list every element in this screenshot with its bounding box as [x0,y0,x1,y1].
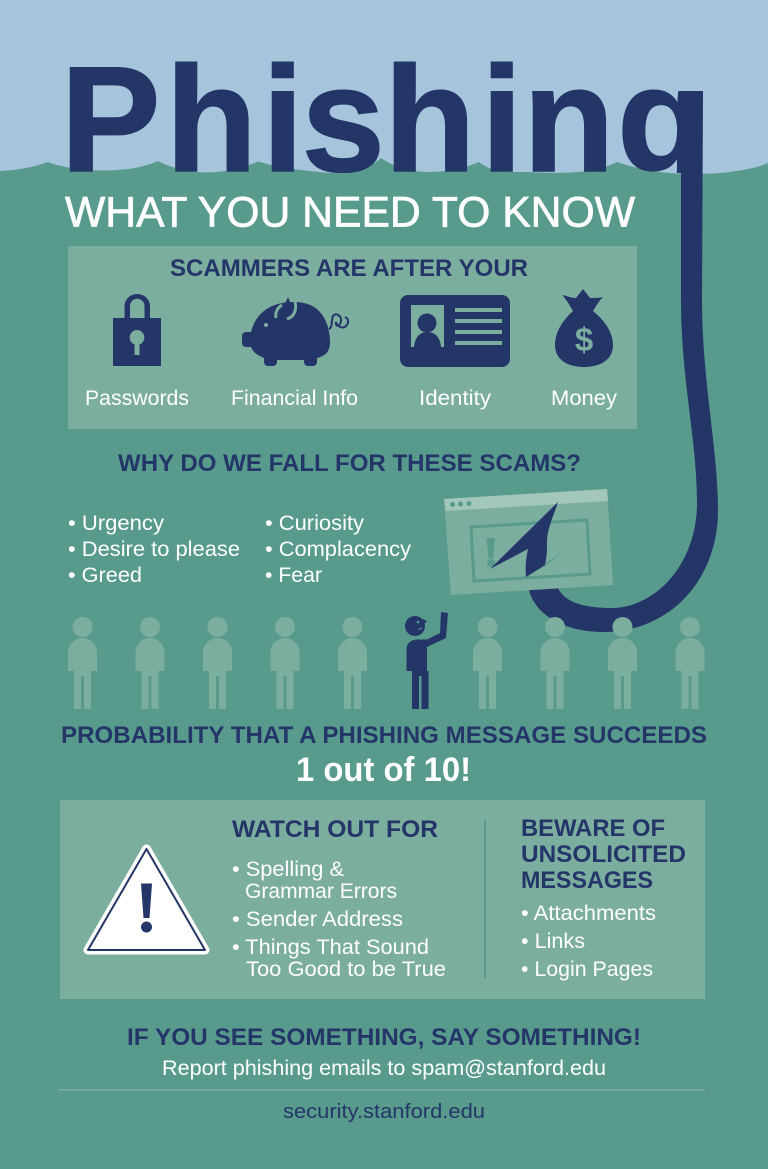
heading: beware of unsolicited messages [521,815,686,894]
person 10 [676,617,704,709]
label: money: Money [551,387,618,410]
heading: beware of unsolicited messages: UNSOLICITED [521,841,686,868]
report instruction: Report phishing emails to spam@stanford.edu [162,1057,606,1080]
list: reasons column two: • Curiosity [265,512,365,535]
heading: why do we fall: WHY DO WE FALL FOR THESE SCAMS? [118,450,581,477]
person 6: navy phished person [405,612,448,709]
person 1 [68,617,97,709]
list: beware items: • Links [521,930,585,953]
list: watch out items: Too Good to be True [246,958,446,981]
list: reasons column one [68,512,240,587]
person 8 [540,617,570,709]
list: beware items: • Attachments [521,902,656,925]
list: beware items: • Login Pages [521,958,653,981]
sky background [0,0,768,180]
heading: beware of unsolicited messages: BEWARE OF [521,815,665,842]
list: watch out items: Grammar Errors [245,880,397,903]
list: watch out items: • Spelling & [232,858,344,881]
person 7 [473,617,502,709]
person 2 [136,617,164,709]
list: watch out items: • Things That Sound [232,936,429,959]
icon: money bag [555,289,613,367]
label: identity: Identity [419,387,492,410]
panel: watch out and beware [60,800,705,999]
heading: beware of unsolicited messages: MESSAGES [521,867,653,894]
list: watch out items [232,858,446,981]
person 5 [338,617,367,709]
list: watch out items: • Sender Address [232,908,403,931]
label: passwords: Passwords [85,387,189,410]
heading: probability: PROBABILITY THAT A PHISHING MESSAGE SUCCEEDS [61,722,707,749]
icon: warning triangle [88,849,205,950]
fish hook line [529,91,718,632]
panel heading: SCAMMERS ARE AFTER YOUR [170,255,528,282]
icon: padlock [113,294,161,366]
icon: hook barb [490,502,558,577]
call to action heading: IF YOU SEE SOMETHING, SAY SOMETHING! [127,1024,641,1051]
panel: scammers are after your [68,246,637,429]
person 9 [608,617,637,709]
statistic: 1 out of 10: 1 out of 10! [296,751,471,789]
person 3 [203,617,232,709]
icon: money bag: $ [575,321,593,358]
people row [68,612,704,709]
icon: piggy bank [242,297,348,366]
list: reasons column one: • Desire to please [68,538,240,561]
icon: id card [400,295,510,367]
list: beware items [521,902,656,981]
list: reasons column two: • Complacency [265,538,412,561]
heading: watch out for: WATCH OUT FOR [232,816,438,843]
list: reasons column one: • Greed [68,564,142,587]
website footer: security.stanford.edu [283,1101,485,1123]
list: reasons column two [265,512,412,587]
label: financial info: Financial Info [231,387,358,410]
illustration: browser window with warning [444,489,613,595]
title: Phishing [60,35,709,203]
subtitle: WHAT YOU NEED TO KNOW [65,188,635,236]
list: reasons column two: • Fear [265,564,322,587]
list: reasons column one: • Urgency [68,512,165,535]
person 4 [270,617,300,709]
